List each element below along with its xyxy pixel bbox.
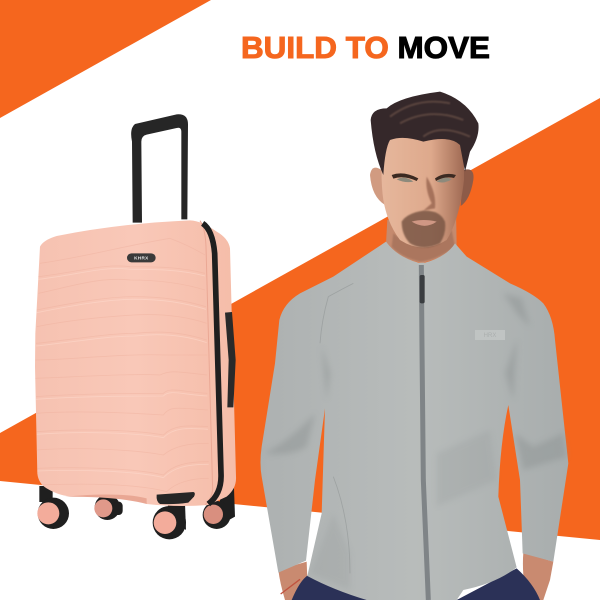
chest logo: HRX [484,333,496,339]
rear wheel right [203,487,235,529]
wrist thread [281,579,300,594]
telescopic handle [131,114,188,223]
base shade [65,495,147,504]
neck shadow [392,230,455,262]
front wheel left [37,486,69,529]
rear wheel left [94,495,123,520]
zipper [203,223,221,504]
title: BUILD TO MOVE [241,30,490,65]
logo badge [127,253,156,262]
right ear [461,169,474,206]
jacket body silhouette [260,242,568,600]
chest logo [475,330,505,340]
beard [402,211,445,247]
orange diagonal band [0,98,600,540]
face [381,137,464,247]
logo badge: KHRX [134,255,149,260]
side handle [225,312,236,407]
body ridges [35,238,209,492]
raglan seams [320,283,353,573]
zipper pull [420,275,425,303]
left hand [278,562,307,600]
nose shadow [423,177,435,211]
right hand [523,553,553,600]
side panel edge [200,221,213,505]
front wheel bracket right [157,492,195,504]
lips [412,220,437,226]
suitcase body [35,220,236,506]
orange corner triangle [0,0,211,118]
left ear [370,168,385,205]
eyes [397,178,452,182]
trousers [292,568,540,600]
neck [386,210,457,263]
zipper [421,265,428,600]
hair highlights [390,102,470,137]
front wheel right [153,503,186,539]
jacket shading [265,293,567,590]
eyebrows [392,173,456,181]
hair [371,92,479,175]
man [260,92,568,600]
suitcase [35,114,236,539]
